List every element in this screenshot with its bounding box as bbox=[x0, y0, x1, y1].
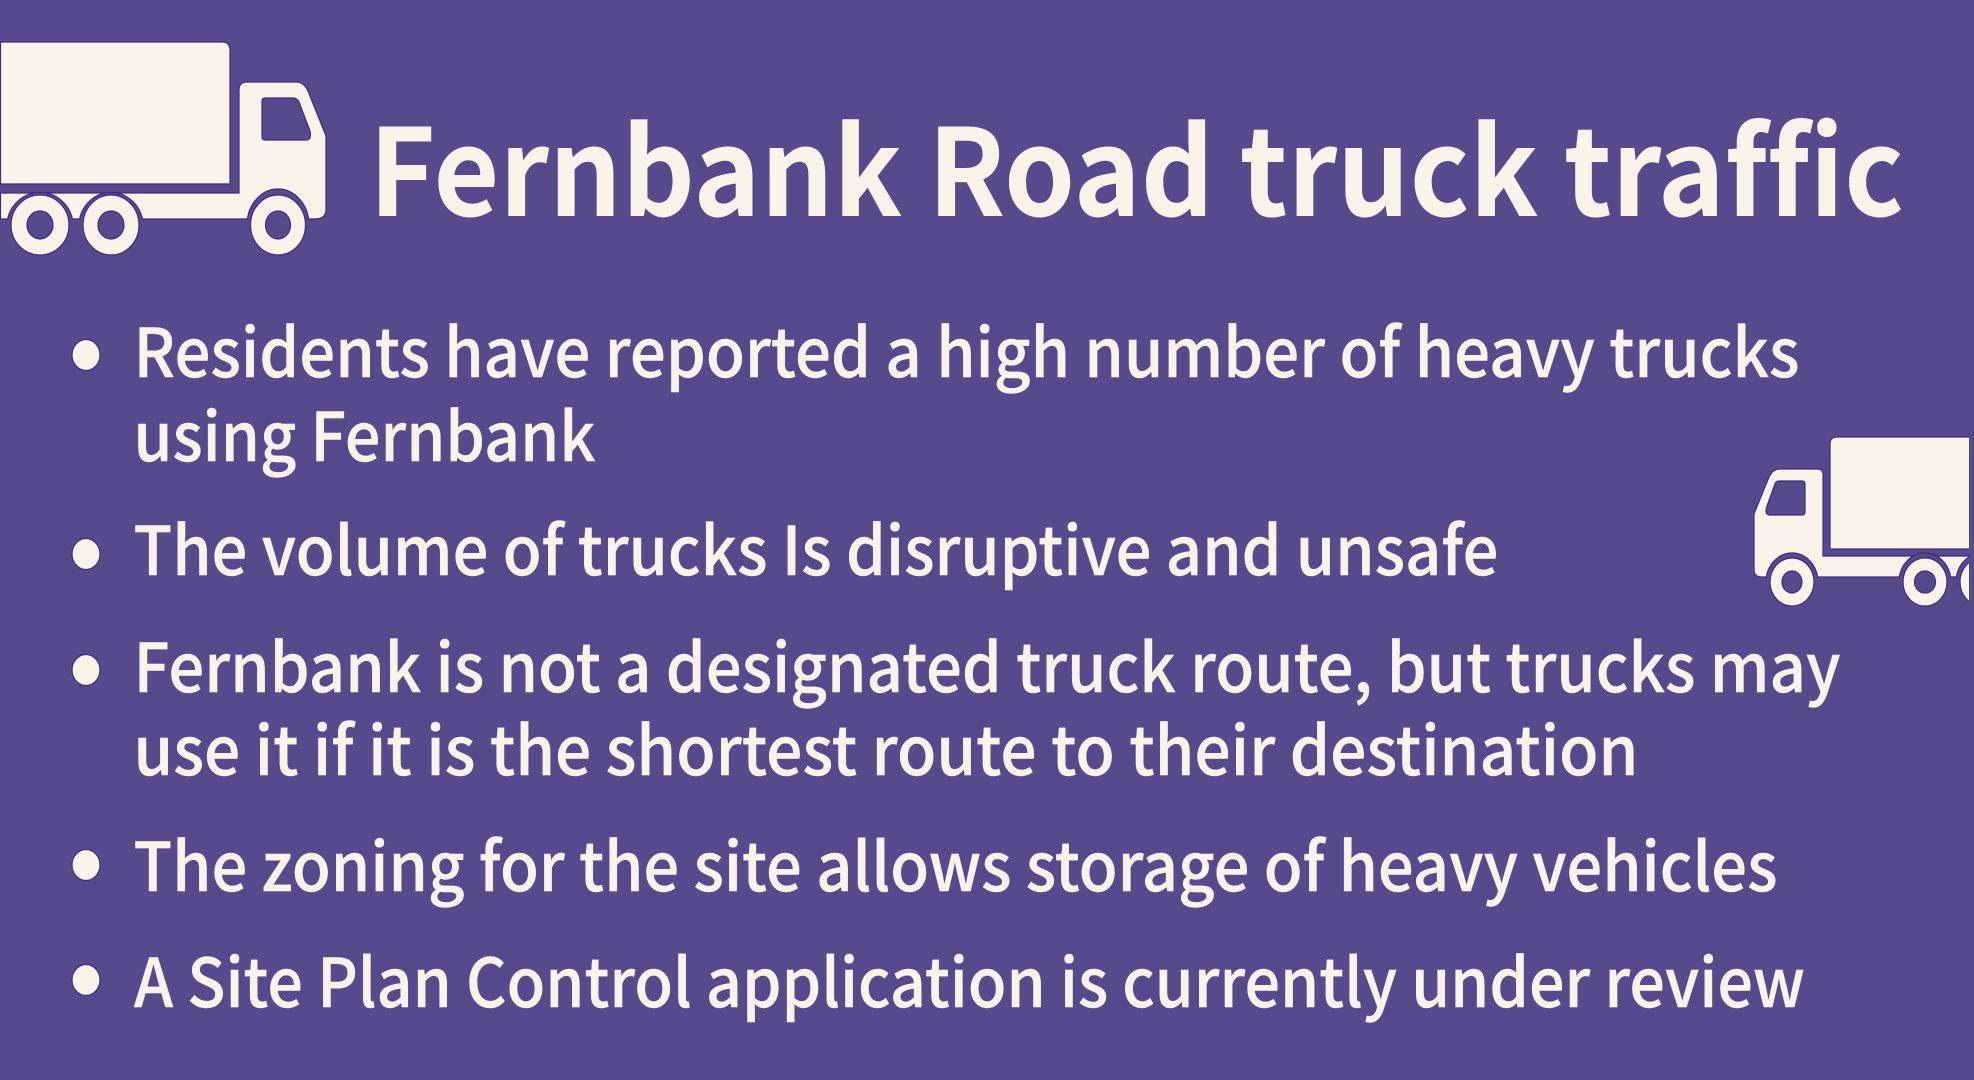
bullet 5: A Site Plan Control application is currently under review bbox=[134, 930, 1805, 1027]
title: Fernbank Road truck traffic bbox=[369, 76, 1904, 251]
bullet list bbox=[72, 300, 1840, 1027]
bullet 3: use it if it is the shortest route to their destination bbox=[134, 698, 1638, 795]
bullet 3: Fernbank is not a designated truck route, but trucks may bbox=[134, 615, 1840, 712]
icon: small truck right edge bbox=[1754, 436, 1969, 606]
bullet 4: The zoning for the site allows storage of heavy vehicles bbox=[134, 814, 1778, 911]
bullet 1: using Fernbank bbox=[134, 384, 596, 481]
bullet 1: Residents have reported a high number of heavy trucks bbox=[134, 300, 1800, 397]
bullet 3 bbox=[72, 615, 1840, 795]
icon: large truck top left bbox=[0, 42, 326, 270]
bullet 1 bbox=[72, 300, 1800, 481]
bullet 2: The volume of trucks Is disruptive and unsafe bbox=[134, 498, 1498, 595]
